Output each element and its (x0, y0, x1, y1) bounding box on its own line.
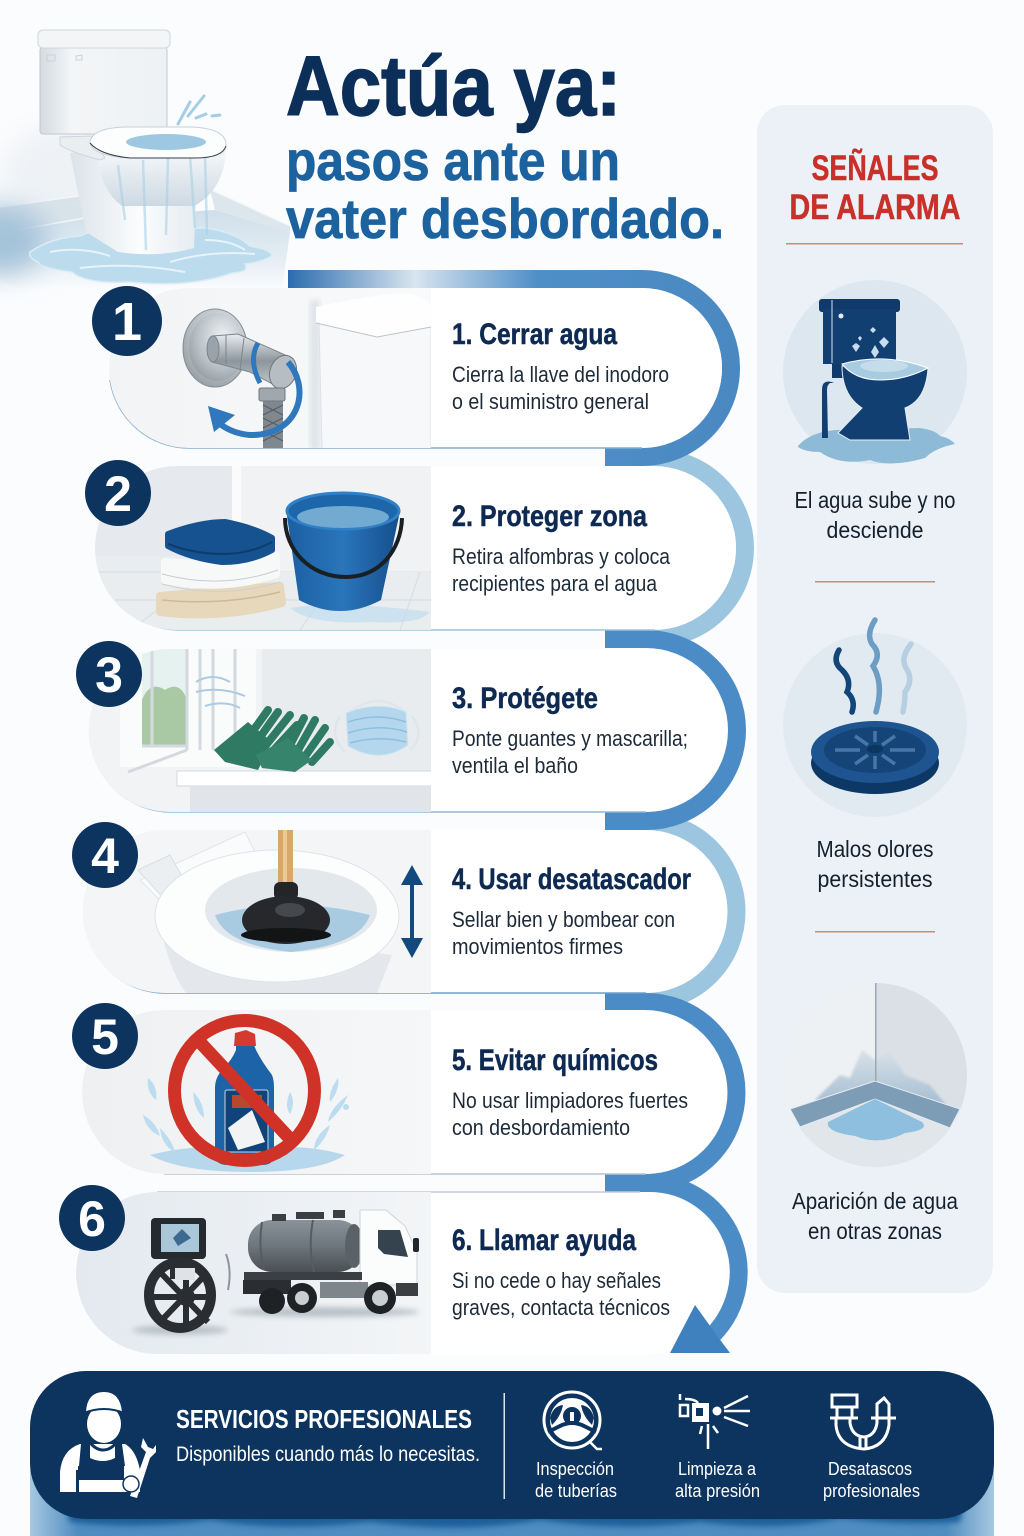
icon: up and down arrow (401, 865, 423, 958)
title: pasos ante un (286, 129, 620, 192)
step 5 text: 5. Evitar químicos (452, 1044, 658, 1077)
step 2 text: recipientes para el agua (452, 571, 658, 596)
step 6 text: 6. Llamar ayuda (452, 1224, 636, 1257)
step 5 text: No usar limpiadores fuertes (452, 1088, 688, 1113)
banner text: SERVICIOS PROFESIONALES (176, 1404, 472, 1434)
step 4 panel (97, 830, 677, 994)
sidebar heading: SEÑALES (812, 149, 938, 188)
step 2 panel (95, 466, 736, 630)
step 4 text (452, 863, 691, 959)
step 2 badge: 2 (104, 466, 132, 522)
hero illustration: overflowing toilet (0, 30, 290, 290)
service labels: alta presión (675, 1481, 760, 1501)
flow ribbon: dark connectors (288, 279, 739, 1344)
step 2 text (452, 500, 671, 596)
sidebar text: bad odours (816, 836, 934, 892)
sidebar text: water rises: desciende (826, 517, 924, 543)
step 5 badge: 5 (91, 1009, 119, 1065)
sidebar text: water rises: El agua sube y no (794, 487, 956, 513)
step 1 badge (92, 286, 162, 356)
step 4 illustration: plunger in toilet (82, 830, 431, 998)
service labels (535, 1459, 920, 1501)
step 4 badge: 4 (91, 828, 119, 884)
service labels: Desatascos (828, 1459, 912, 1479)
step 4 text: Sellar bien y bombear con (452, 907, 675, 932)
arrow: end of flow ribbon (670, 1305, 730, 1353)
sidebar text: water rises (794, 487, 956, 543)
panel: professional services banner (30, 1371, 994, 1519)
step 5 badge (72, 1003, 138, 1069)
step 1 text: 1. Cerrar agua (452, 318, 617, 351)
icon: drain with odour waves (783, 620, 967, 817)
icon: toilet with rising water (783, 280, 967, 464)
title: Actúa ya: (286, 39, 621, 133)
icon: plumber with wrench (60, 1392, 156, 1498)
step 4 text: 4. Usar desatascador (452, 863, 691, 896)
step 5 text (452, 1044, 688, 1140)
flow ribbon: light connectors (630, 458, 745, 1002)
step 3 text (452, 682, 688, 778)
service labels: Limpieza a (678, 1459, 757, 1479)
step 6 badge (59, 1185, 125, 1251)
step 2 text: 2. Proteger zona (452, 500, 647, 533)
step 6 panel (75, 1192, 729, 1354)
step 1 text (452, 318, 669, 414)
footer water strip (30, 1470, 994, 1536)
step 6 text: Si no cede o hay señales (452, 1268, 661, 1293)
step 5 text: con desbordamiento (452, 1115, 630, 1140)
step 3 illustration: window, gloves and mask (88, 649, 437, 816)
icon: water stain in wall corner (783, 983, 967, 1167)
banner text: Disponibles cuando más lo necesitas. (176, 1443, 480, 1466)
step 1 text: Cierra la llave del inodoro (452, 362, 669, 387)
step 3 badge (76, 641, 142, 707)
step 4 badge (72, 822, 138, 888)
service labels: profesionales (823, 1481, 920, 1501)
step 4 text: movimientos firmes (452, 934, 623, 959)
sidebar heading (790, 149, 960, 227)
icon: pipe inspection (544, 1392, 602, 1449)
step 2 text: Retira alfombras y coloca (452, 544, 671, 569)
icon: high pressure jet (680, 1394, 750, 1449)
step 6 badge: 6 (78, 1191, 106, 1247)
banner text (176, 1404, 480, 1466)
step 5 panel (82, 1010, 727, 1174)
step 2 badge (85, 460, 151, 526)
title: vater desbordado. (286, 187, 724, 250)
step 3 text: 3. Protégete (452, 682, 598, 715)
step 1 illustration: shutoff valve and tank (108, 288, 431, 457)
step 6 illustration: inspection camera and tanker truck (75, 1192, 431, 1354)
step 3 badge: 3 (95, 647, 123, 703)
title (286, 39, 724, 250)
step 3 panel (88, 649, 673, 813)
step 1 text: o el suministro general (452, 389, 649, 414)
step 2 illustration: towels and bucket (95, 466, 431, 630)
service labels: de tuberías (535, 1481, 617, 1501)
step 3 text: Ponte guantes y mascarilla; (452, 726, 688, 751)
step 3 text: ventila el baño (452, 753, 578, 778)
icon: pipe trap (830, 1395, 896, 1449)
sidebar text: bad odours: persistentes (818, 866, 932, 892)
panel: warning signs sidebar (757, 105, 993, 1293)
sidebar heading: DE ALARMA (790, 188, 960, 227)
sidebar text: water elsewhere (792, 1188, 958, 1244)
service labels: Inspección (536, 1459, 614, 1479)
sidebar text: water elsewhere: en otras zonas (808, 1218, 942, 1244)
step 5 illustration: banned chemical bottle (82, 1010, 431, 1174)
step 1 badge: 1 (112, 292, 142, 352)
step 6 text (452, 1224, 670, 1320)
sidebar text: water elsewhere: Aparición de agua (792, 1188, 958, 1214)
step 1 panel (108, 288, 722, 457)
step 6 text: graves, contacta técnicos (452, 1295, 670, 1320)
sidebar text: bad odours: Malos olores (816, 836, 934, 862)
